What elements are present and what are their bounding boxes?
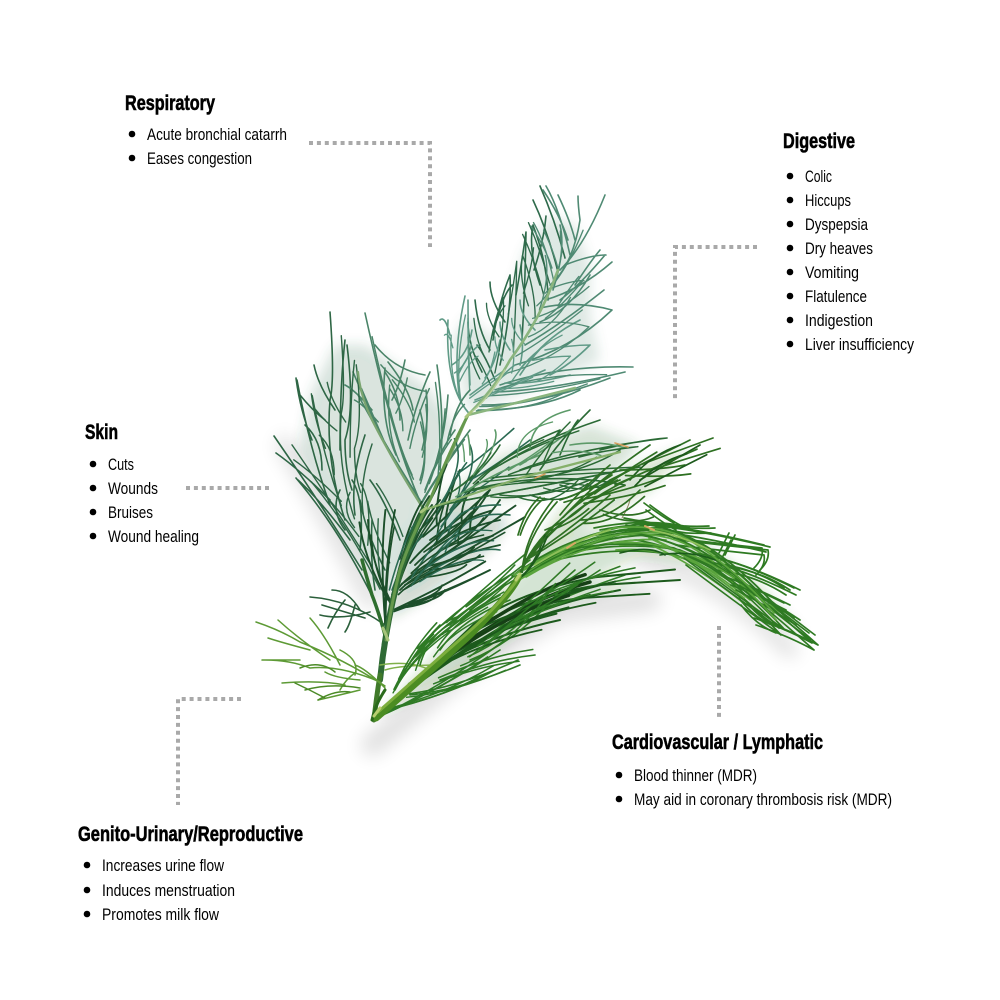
heading: genito-urinary / reproductive: Genito-Urinary/Reproductive	[78, 823, 303, 846]
bullet list: digestive: Dry heaves	[805, 239, 873, 258]
leader line: skin	[186, 486, 270, 490]
bullet list: skin: Bruises	[108, 503, 153, 522]
bullet list: digestive: Colic	[805, 167, 832, 186]
frond: lower long branch	[376, 560, 680, 718]
frond: left dark green	[274, 312, 470, 600]
bullet list: genito-urinary: Induces menstruation	[102, 881, 235, 900]
leader line: genito-urinary	[178, 699, 241, 805]
bullet list: digestive: Liver insufficiency	[805, 335, 914, 354]
bullet list: genito-urinary: Increases urine flow	[102, 856, 225, 875]
heading: skin: Skin	[85, 421, 118, 444]
panel: cardiovascular / lymphatic	[612, 731, 892, 809]
bullet list: respiratory: Eases congestion	[147, 149, 252, 168]
heading: respiratory: Respiratory	[125, 92, 215, 115]
leader line: respiratory	[309, 143, 430, 247]
frond: middle right	[440, 410, 667, 505]
frond: arching right branch	[518, 505, 818, 645]
bullet list: skin: Wounds	[108, 479, 158, 498]
bullet list: digestive: Flatulence	[805, 287, 867, 306]
bullet list: genito-urinary: Promotes milk flow	[102, 905, 220, 924]
frond: lower dark hanging	[368, 440, 530, 625]
frond: upper blue-green	[440, 186, 633, 412]
main stem	[362, 412, 471, 720]
icon: dill sprig	[256, 186, 818, 745]
leader line: cardiovascular	[717, 626, 721, 717]
foliage colour mass	[300, 215, 805, 718]
plant soft shadow	[285, 445, 790, 745]
bullet list: digestive: Dyspepsia	[805, 215, 868, 234]
panel: digestive	[783, 130, 914, 354]
bullet list: digestive: Hiccups	[805, 191, 851, 210]
bullet list: cardiovascular	[616, 766, 892, 809]
leader line: digestive	[675, 247, 757, 399]
bullet list: respiratory	[129, 125, 287, 168]
frond: lower-left sprig	[256, 618, 440, 700]
bullet list: digestive: Indigestion	[805, 311, 873, 330]
bullet list: respiratory: Acute bronchial catarrh	[147, 125, 287, 144]
bullet list: digestive	[787, 167, 914, 354]
bullet list: cardiovascular: May aid in coronary thrombosis risk (MDR)	[634, 790, 892, 809]
frond: upward branch	[518, 438, 713, 578]
panel: respiratory	[125, 92, 287, 168]
bullet list: genito-urinary	[84, 856, 235, 924]
bullet list: digestive: Vomiting	[805, 263, 859, 282]
stem base	[372, 574, 520, 720]
heading: cardiovascular / lymphatic: Cardiovascular / Lymphatic	[612, 731, 823, 754]
bullet list: skin: Wound healing	[108, 527, 199, 546]
bullet list: skin: Cuts	[108, 455, 134, 474]
panel: genito-urinary / reproductive	[78, 823, 303, 924]
bullet list: skin	[90, 455, 199, 546]
bullet list: cardiovascular: Blood thinner (MDR)	[634, 766, 757, 785]
heading: digestive: Digestive	[783, 130, 855, 153]
panel: skin	[85, 421, 199, 546]
